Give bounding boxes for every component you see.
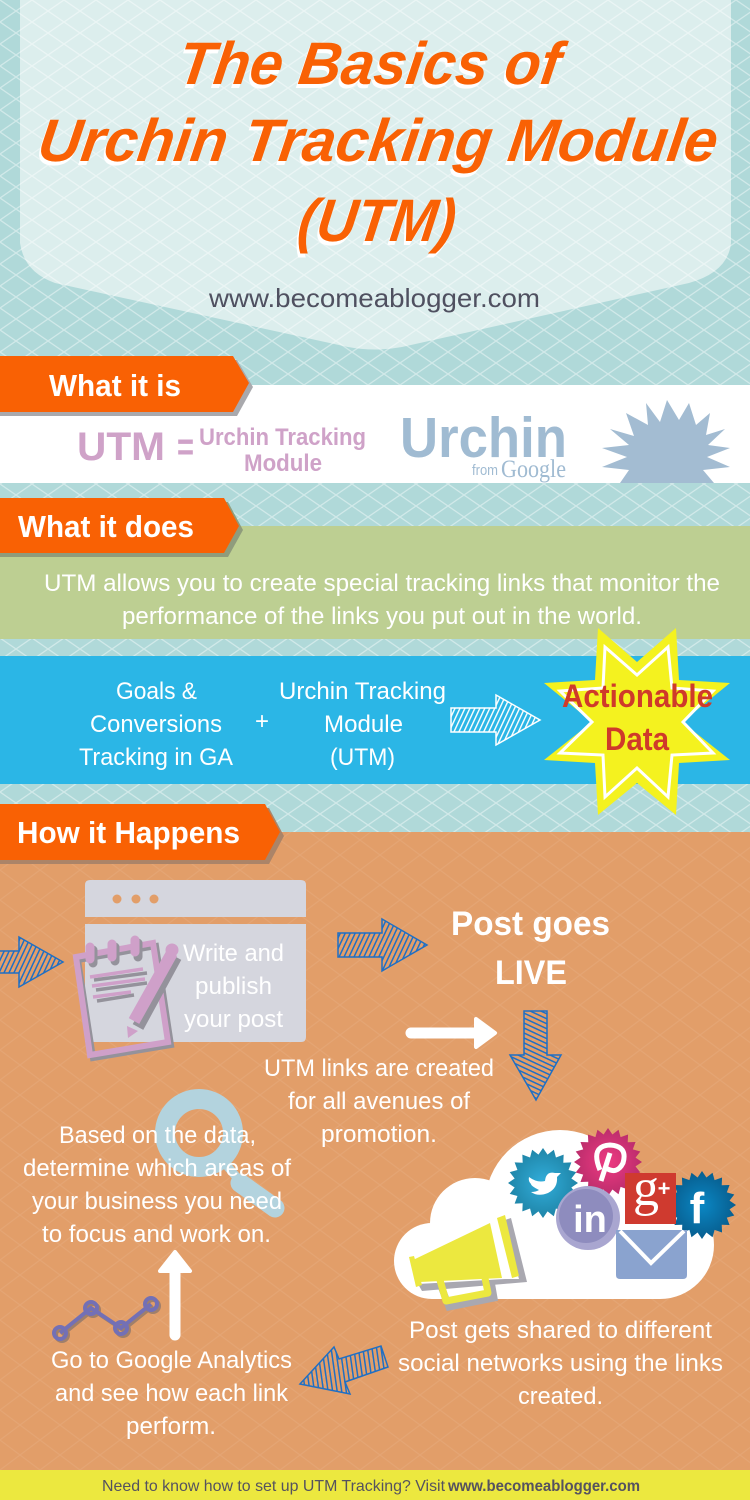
- text: write and publish: your post: [184, 1006, 283, 1033]
- text: based on the data: Based on the data,: [59, 1122, 256, 1149]
- footer: [0, 1470, 750, 1500]
- text: based on the data: determine which areas of: [23, 1155, 291, 1182]
- text: write and publish: Write and: [183, 940, 284, 967]
- browser window: [85, 880, 306, 1042]
- icon: megaphone: [409, 1215, 527, 1307]
- icon: google plus: +: [658, 1176, 670, 1201]
- text: go to google analytics: Go to Google Analytics: [51, 1347, 292, 1374]
- heading: what it is: [0, 356, 253, 416]
- panel: formula: Goals &: [116, 678, 197, 705]
- heading: how it happens: [0, 804, 284, 864]
- title: The Basics of: [172, 33, 569, 101]
- text: utm links created: for all avenues of: [288, 1088, 470, 1115]
- title: The Basics of: [174, 29, 571, 97]
- text: write and publish: [183, 940, 284, 1033]
- panel: formula: (UTM): [330, 744, 395, 771]
- heading: what it does: What it does: [18, 509, 194, 544]
- starburst: actionable data: Actionable: [562, 678, 713, 714]
- cloud: [394, 1130, 714, 1299]
- title: (UTM): [292, 190, 459, 258]
- arrow: into write step: [0, 937, 63, 987]
- icon: spiky burst: [602, 400, 730, 483]
- utm equation: =: [177, 425, 194, 469]
- text: go to google analytics: perform.: [126, 1413, 216, 1440]
- panel: formula: Conversions: [90, 711, 222, 738]
- title: [32, 29, 723, 258]
- utm equation: Module: [244, 450, 322, 477]
- arrow: white up: [160, 1252, 190, 1335]
- panel: formula: [0, 656, 750, 784]
- icon: facebook badge: f: [690, 1184, 705, 1233]
- title: Urchin Tracking Module: [32, 110, 721, 178]
- panel: formula: Module: [324, 711, 403, 738]
- text: utm links created: [264, 1055, 494, 1148]
- text: go to google analytics: [51, 1347, 292, 1440]
- text: write and publish: publish: [195, 973, 272, 1000]
- text: post goes live: Post goes: [451, 905, 610, 943]
- icon: twitter badge: [508, 1148, 578, 1218]
- urchin logo: Google: [501, 456, 566, 483]
- website url: www.becomeablogger.com: [208, 283, 540, 313]
- text: post goes live: LIVE: [495, 954, 567, 992]
- text: based on the data: [23, 1122, 291, 1248]
- icon: linkedin: [556, 1186, 620, 1250]
- utm equation: Urchin Tracking: [199, 424, 366, 451]
- panel: formula: Tracking in GA: [79, 744, 233, 771]
- title: Urchin Tracking Module: [34, 106, 723, 174]
- text: utm links created: UTM links are created: [264, 1055, 494, 1082]
- panel: what it does: UTM allows you to create special tracking links that monitor the: [44, 570, 720, 597]
- icon: linkedin: in: [573, 1199, 607, 1241]
- icon: google plus: g: [633, 1160, 659, 1217]
- header panel: [20, 0, 731, 350]
- icon: notepad and pencil: [76, 940, 178, 1058]
- icon: envelope: [616, 1230, 687, 1279]
- urchin logo: from: [472, 462, 498, 479]
- title: (UTM): [294, 186, 461, 254]
- starburst: actionable data: [544, 628, 730, 815]
- text: go to google analytics: and see how each link: [55, 1380, 289, 1407]
- arrow: left to analytics: [300, 1346, 388, 1394]
- icon: facebook badge: [668, 1171, 736, 1239]
- starburst: actionable data: Data: [605, 721, 669, 757]
- panel: what it is: [0, 385, 750, 483]
- footer: Need to know how to set up UTM Tracking? Visit: [102, 1478, 446, 1495]
- icon: pinterest badge: [574, 1128, 642, 1196]
- arrow: to actionable data: [451, 695, 540, 745]
- utm equation: [77, 424, 366, 477]
- utm equation: UTM: [77, 425, 165, 469]
- footer: www.becomeablogger.com: [447, 1478, 640, 1495]
- text: post gets shared: Post gets shared to different: [409, 1317, 712, 1344]
- panel: formula: +: [255, 708, 269, 735]
- panel: what it does: [0, 526, 750, 639]
- text: post gets shared: created.: [518, 1383, 603, 1410]
- panel: how it happens: [0, 832, 750, 1470]
- text: post goes live: [451, 905, 610, 992]
- heading: what it is: What it is: [49, 368, 181, 403]
- icon: google plus: [625, 1160, 676, 1224]
- heading: how it happens: How it Happens: [17, 815, 240, 850]
- panel: what it does: performance of the links you put out in the world.: [122, 603, 642, 630]
- text: post gets shared: [398, 1317, 723, 1410]
- urchin logo: Urchin: [400, 406, 567, 470]
- arrow: white right: [411, 1019, 495, 1047]
- arrow: to post goes live: [338, 919, 427, 971]
- text: based on the data: to focus and work on.: [42, 1221, 271, 1248]
- heading: what it does: [0, 498, 243, 557]
- text: based on the data: your business you need: [32, 1188, 282, 1215]
- text: utm links created: promotion.: [321, 1121, 437, 1148]
- arrow: down to social: [510, 1011, 561, 1100]
- icon: magnifying glass: [165, 1099, 275, 1208]
- text: post gets shared: social networks using the links: [398, 1350, 723, 1377]
- icon: line chart: [54, 1298, 159, 1341]
- panel: formula: Urchin Tracking: [279, 678, 446, 705]
